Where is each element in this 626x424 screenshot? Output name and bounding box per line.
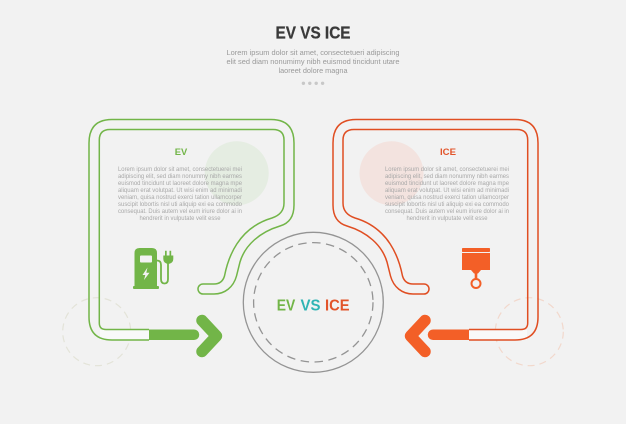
panel: ICE [333, 120, 563, 366]
bar track: EV [100, 330, 150, 340]
body text: ICE: aliquam erat volutpat. Ut wisi enim ad minimadi [385, 188, 509, 194]
body text: EV: adipiscing elit, sed diam nonummy nibh earmes [118, 174, 242, 180]
double outline: ICE [333, 120, 538, 340]
pagination dots [302, 82, 324, 85]
center label: EV [277, 298, 296, 315]
body text: EV: consequat. Duis autem vel eum iriure dolor ai in [118, 209, 242, 215]
center label [277, 298, 350, 315]
body text: ICE [385, 167, 510, 222]
subtitle text: elit sed diam nonumimy nibh euismod tincidunt utare [226, 59, 400, 66]
body text: EV: veniam, quisa nostrud exerci tation ullamcorper [118, 195, 242, 201]
dashed accent circle: EV [63, 298, 131, 366]
icon: piston [462, 248, 490, 288]
body text: ICE: hendrerit in vulputate velit esse [406, 216, 488, 222]
bar track: ICE [469, 330, 527, 340]
panel: EV [63, 120, 294, 366]
body text: EV: hendrerit in vulputate velit esse [140, 216, 221, 222]
subtitle text [226, 50, 400, 75]
body text: EV [118, 167, 243, 222]
soft accent circle: ICE [360, 141, 424, 205]
heading: ICE: ICE [440, 147, 456, 158]
soft accent circle: EV [205, 141, 269, 205]
body text: ICE: Lorem ipsum dolor sit amet, consectetuerei mei [385, 167, 509, 173]
body text: ICE: suscipit lobortis nisl uti aliquip exi ea commodo [385, 202, 510, 208]
body text: ICE: adipiscing elit, sed diam nonummy nibh earmes [385, 174, 509, 180]
subtitle text: laoreet dolore magna [278, 68, 348, 75]
body text: EV: aliquam erat volutpat. Ut wisi enim ad minimadi [118, 188, 242, 194]
dashed accent circle: ICE [495, 298, 563, 366]
icon: charging station [133, 248, 173, 289]
center label: VS [300, 298, 321, 315]
arrow bar: EV [149, 330, 199, 340]
arrow head: EV [202, 320, 216, 352]
title: EV VS ICE [276, 22, 350, 42]
heading: EV: EV [175, 147, 188, 158]
center circle [243, 232, 383, 372]
subtitle text: Lorem ipsum dolor sit amet, consectetueri adipiscing [226, 50, 400, 57]
body text: EV: euismod tincidunt ut laoreet dolore magna mpe [118, 181, 243, 187]
arrow bar: ICE [428, 330, 469, 340]
double outline: EV [89, 120, 294, 340]
center label: ICE [325, 298, 350, 315]
arrow head: ICE [410, 320, 425, 352]
body text: EV: Lorem ipsum dolor sit amet, consectetuerei mei [118, 167, 242, 173]
body text: ICE: euismod tincidunt ut laoreet dolore magna mpe [385, 181, 510, 187]
body text: ICE: consequat. Duis autem vel eum iriure dolor ai in [385, 209, 509, 215]
body text: EV: suscipit lobortis nisl uti aliquip exi ea commodo [118, 202, 243, 208]
body text: ICE: veniam, quisa nostrud exerci tation ullamcorper [385, 195, 509, 201]
